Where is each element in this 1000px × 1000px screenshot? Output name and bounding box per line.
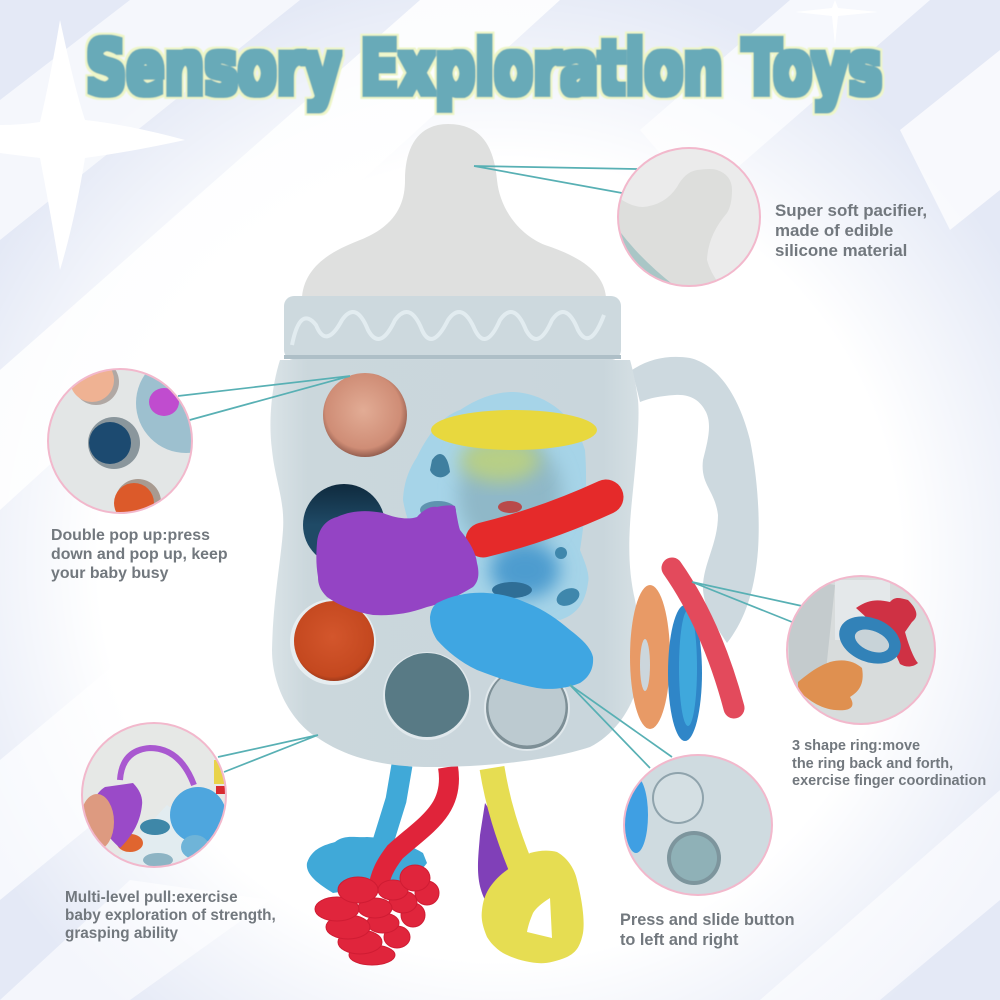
text: multi-level pull: baby exploration of strength, bbox=[65, 907, 276, 924]
handle bbox=[632, 357, 759, 643]
blue teether bbox=[430, 593, 593, 689]
nipple bbox=[302, 124, 606, 297]
orange ring bbox=[630, 585, 670, 729]
text: pacifier: made of edible bbox=[775, 221, 893, 240]
text: rings: 3 shape ring:move bbox=[792, 738, 920, 754]
text: double pop up: down and pop up, keep bbox=[51, 546, 228, 563]
collar with wavy line bbox=[284, 296, 621, 360]
text: pacifier: silicone material bbox=[775, 241, 907, 260]
purple teether bbox=[316, 505, 478, 615]
text: slide button: Press and slide button bbox=[620, 911, 795, 929]
text: pacifier: Super soft pacifier, bbox=[775, 201, 927, 220]
callout lines bbox=[178, 166, 802, 772]
red ring bbox=[672, 568, 734, 708]
text: double pop up: Double pop up:press bbox=[51, 527, 210, 544]
text: rings: exercise finger coordination bbox=[792, 773, 986, 789]
text: multi-level pull: grasping ability bbox=[65, 925, 179, 942]
text: multi-level pull: Multi-level pull:exercise bbox=[65, 889, 238, 906]
bottle body bbox=[270, 360, 640, 767]
text: slide button: to left and right bbox=[620, 931, 739, 949]
product: baby bottle sensory toy bbox=[270, 124, 759, 965]
callout: pacifier detail bbox=[615, 148, 760, 290]
callout: double pop up detail bbox=[47, 368, 193, 514]
text: double pop up: your baby busy bbox=[51, 565, 169, 582]
blue ring bbox=[668, 605, 702, 741]
raspberry teether bbox=[315, 865, 439, 965]
text: rings: the ring back and forth, bbox=[792, 756, 953, 772]
center wheel bbox=[403, 392, 589, 620]
pop-up buttons bbox=[290, 373, 570, 751]
red teether bbox=[483, 497, 606, 540]
pull cords with teethers bbox=[307, 765, 584, 965]
yellow teether bbox=[431, 410, 597, 450]
callout: slide button detail bbox=[624, 755, 774, 895]
callout: multi-level pull detail bbox=[80, 723, 226, 868]
callout: rings detail bbox=[787, 576, 935, 724]
